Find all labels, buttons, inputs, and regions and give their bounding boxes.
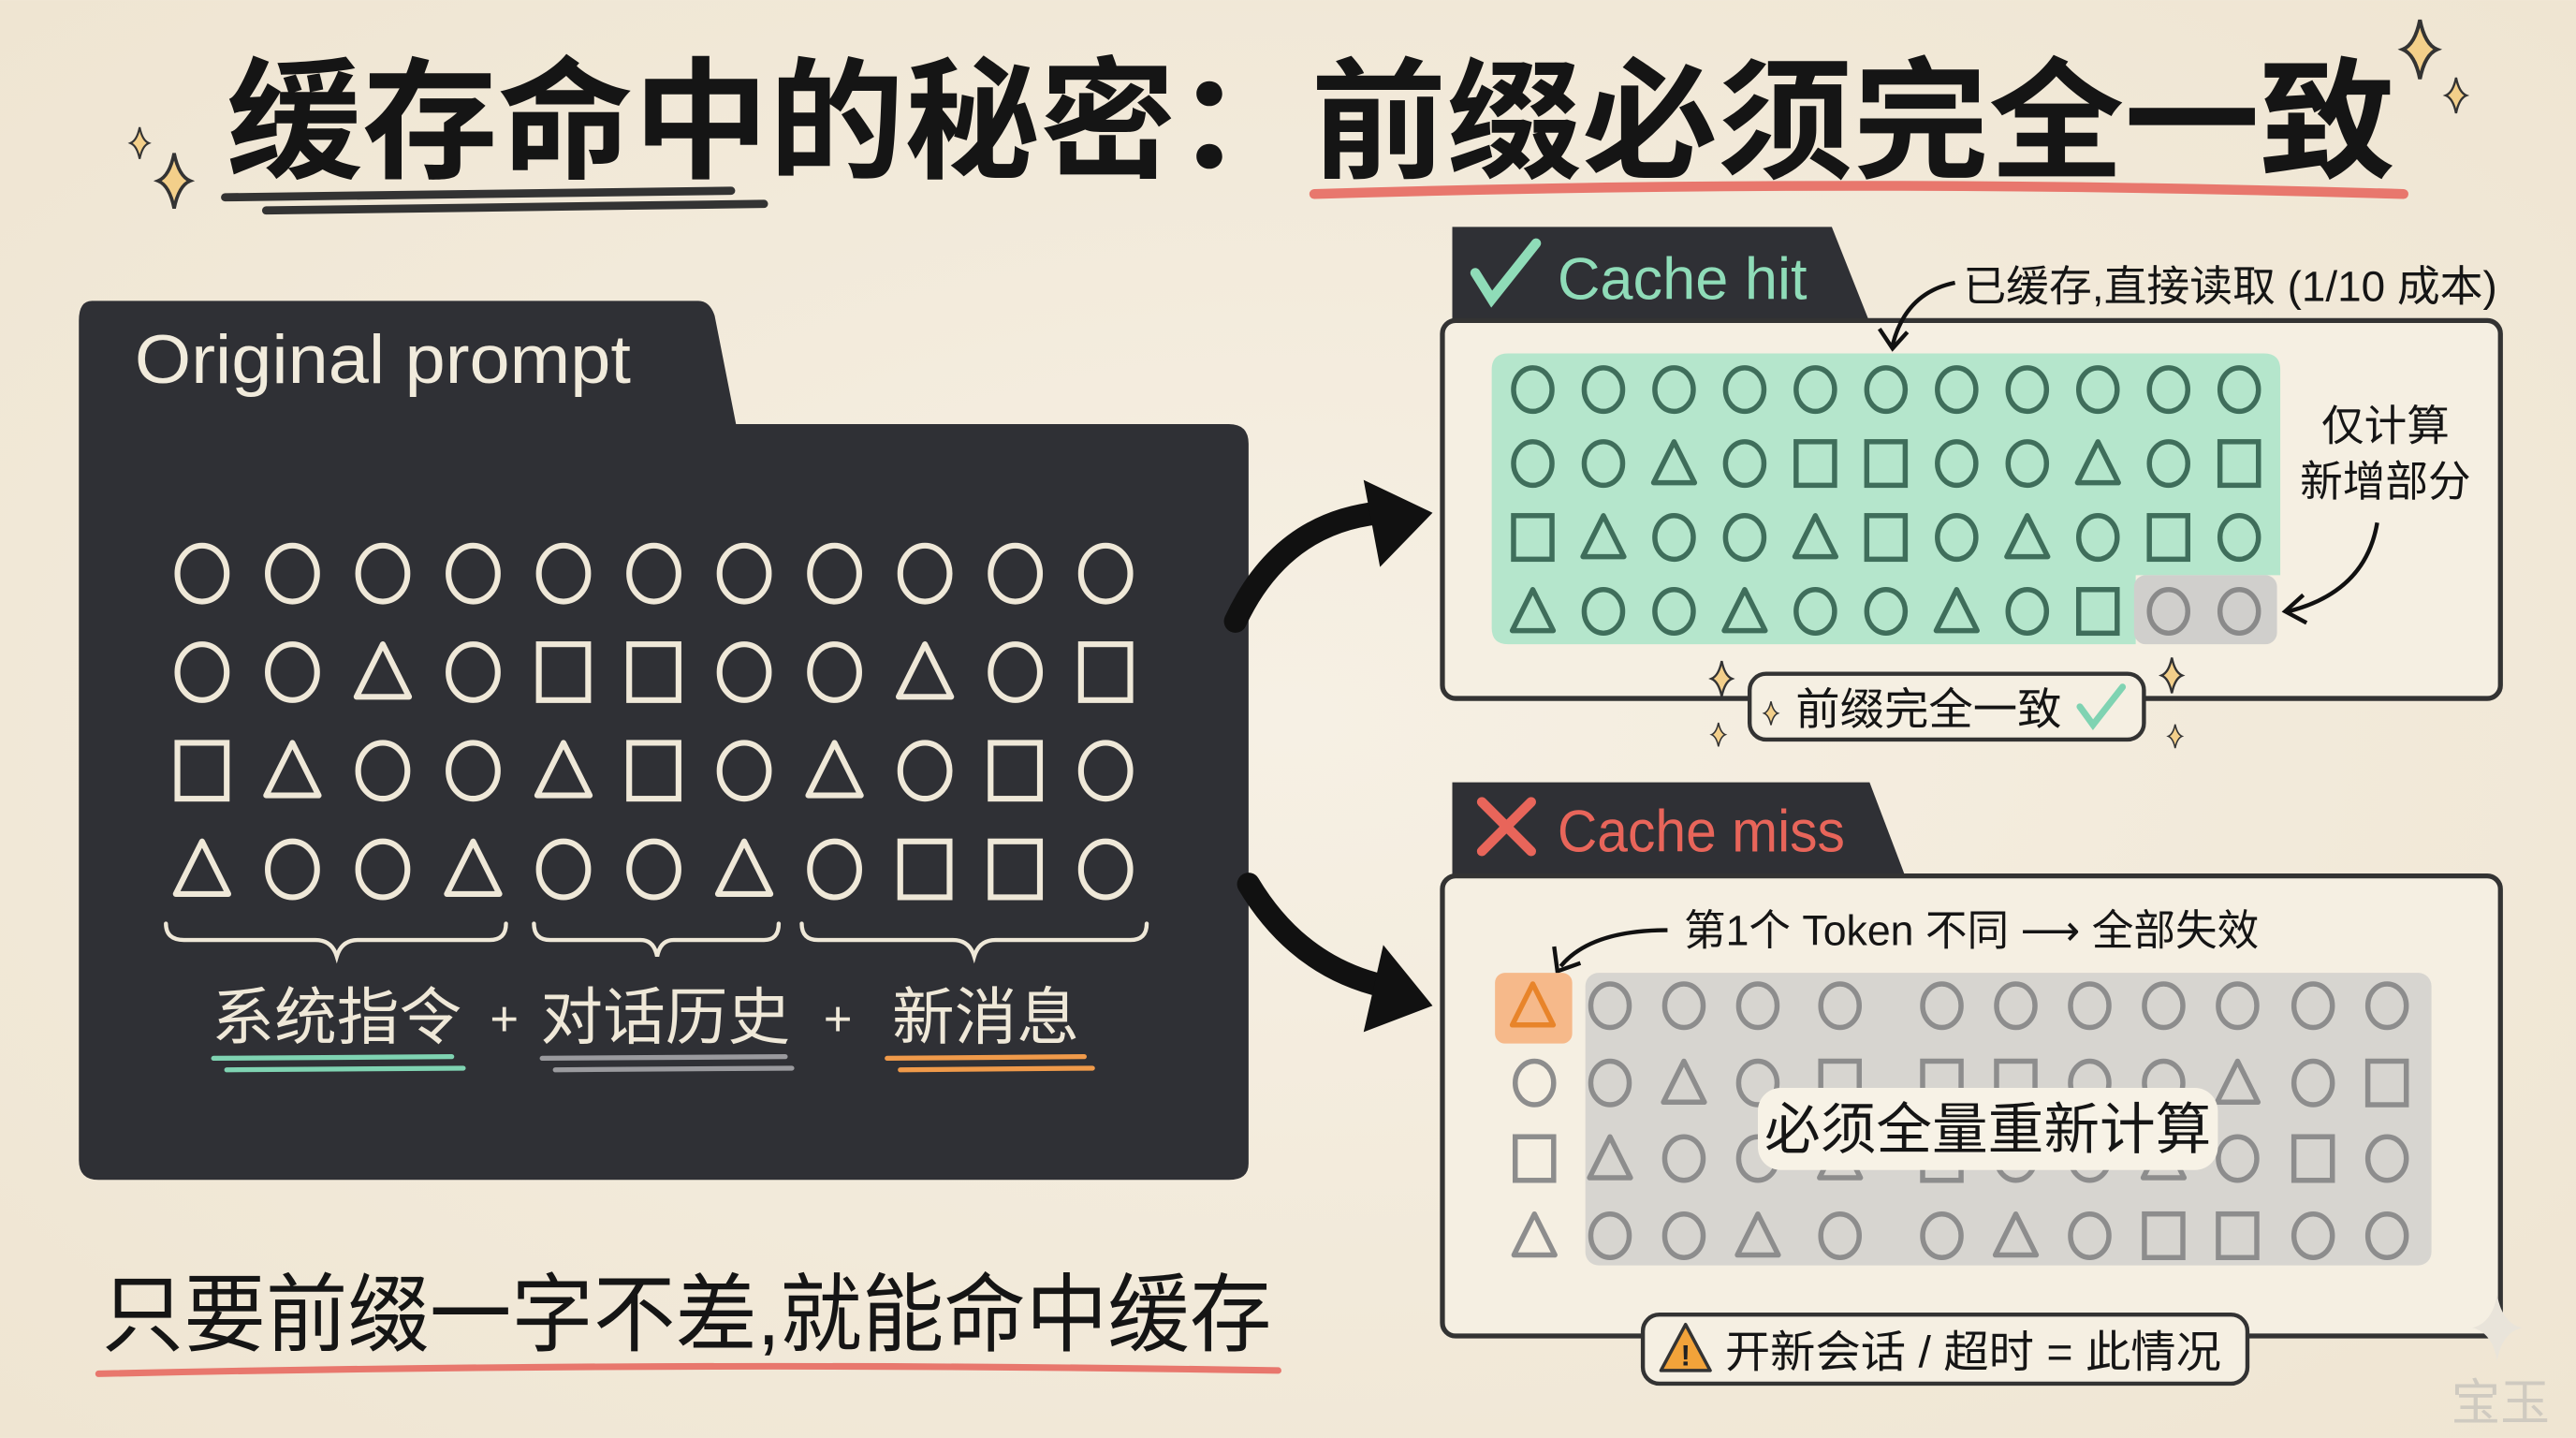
grid: cached tokens [1513,368,2259,633]
watermark: 宝玉 [2452,1376,2550,1431]
labels: prompt parts: + [824,991,852,1047]
callout: compute new only: 仅计算 [2321,403,2450,450]
grid: invalidated tokens [1514,984,2407,1257]
labels: prompt parts: + [490,991,519,1047]
heading: cache miss: Cache miss [1558,799,1845,864]
grid: original tokens [176,546,1131,897]
green cached area [1492,353,2280,644]
labels: prompt parts [212,983,1079,1052]
braces [166,924,1147,957]
heading: Original prompt: Original prompt [135,320,631,398]
badge: prefix match: 前缀完全一致 [1795,685,2062,735]
title: 缓存命中的秘密：前缀必须完全一致 [227,49,2395,196]
watermark [2452,1295,2550,1431]
callout: first token differs [1554,906,2259,971]
heading: cache hit: Cache hit [1558,247,1808,313]
panel: cache miss [1442,783,2500,1384]
callout: compute new only: 新增部分 [2300,458,2471,506]
arrow: to cache miss [1249,884,1432,1032]
panel: cache hit [1442,227,2500,748]
icon: sparkles title [130,20,2466,209]
labels: prompt parts: 系统指令 [212,983,461,1052]
bottom statement: 只要前缀一字不差,就能命中缓存 [102,1268,1271,1363]
callout: first token differs: 第1个 Token 不同 ⟶ 全部失效 [1684,906,2259,954]
callout: cached read [1880,262,2497,348]
badge: prefix match [1711,658,2182,748]
arrow: to cache hit [1236,480,1432,622]
badge: new session / timeout [1643,1314,2247,1384]
callout: compute new only [2285,403,2471,623]
labels: prompt parts: 新消息 [892,983,1079,1052]
callout: cached read: 已缓存,直接读取 (1/10 成本) [1963,262,2497,310]
labels: prompt parts: 对话历史 [540,983,790,1052]
panel: original prompt [79,301,1249,1180]
icon: differing token [1513,984,1553,1025]
badge: new session / timeout: ! [1680,1339,1690,1372]
badge: new session / timeout: 开新会话 / 超时 = 此情况 [1725,1328,2221,1377]
label: recompute all: 必须全量重新计算 [1764,1098,2211,1161]
